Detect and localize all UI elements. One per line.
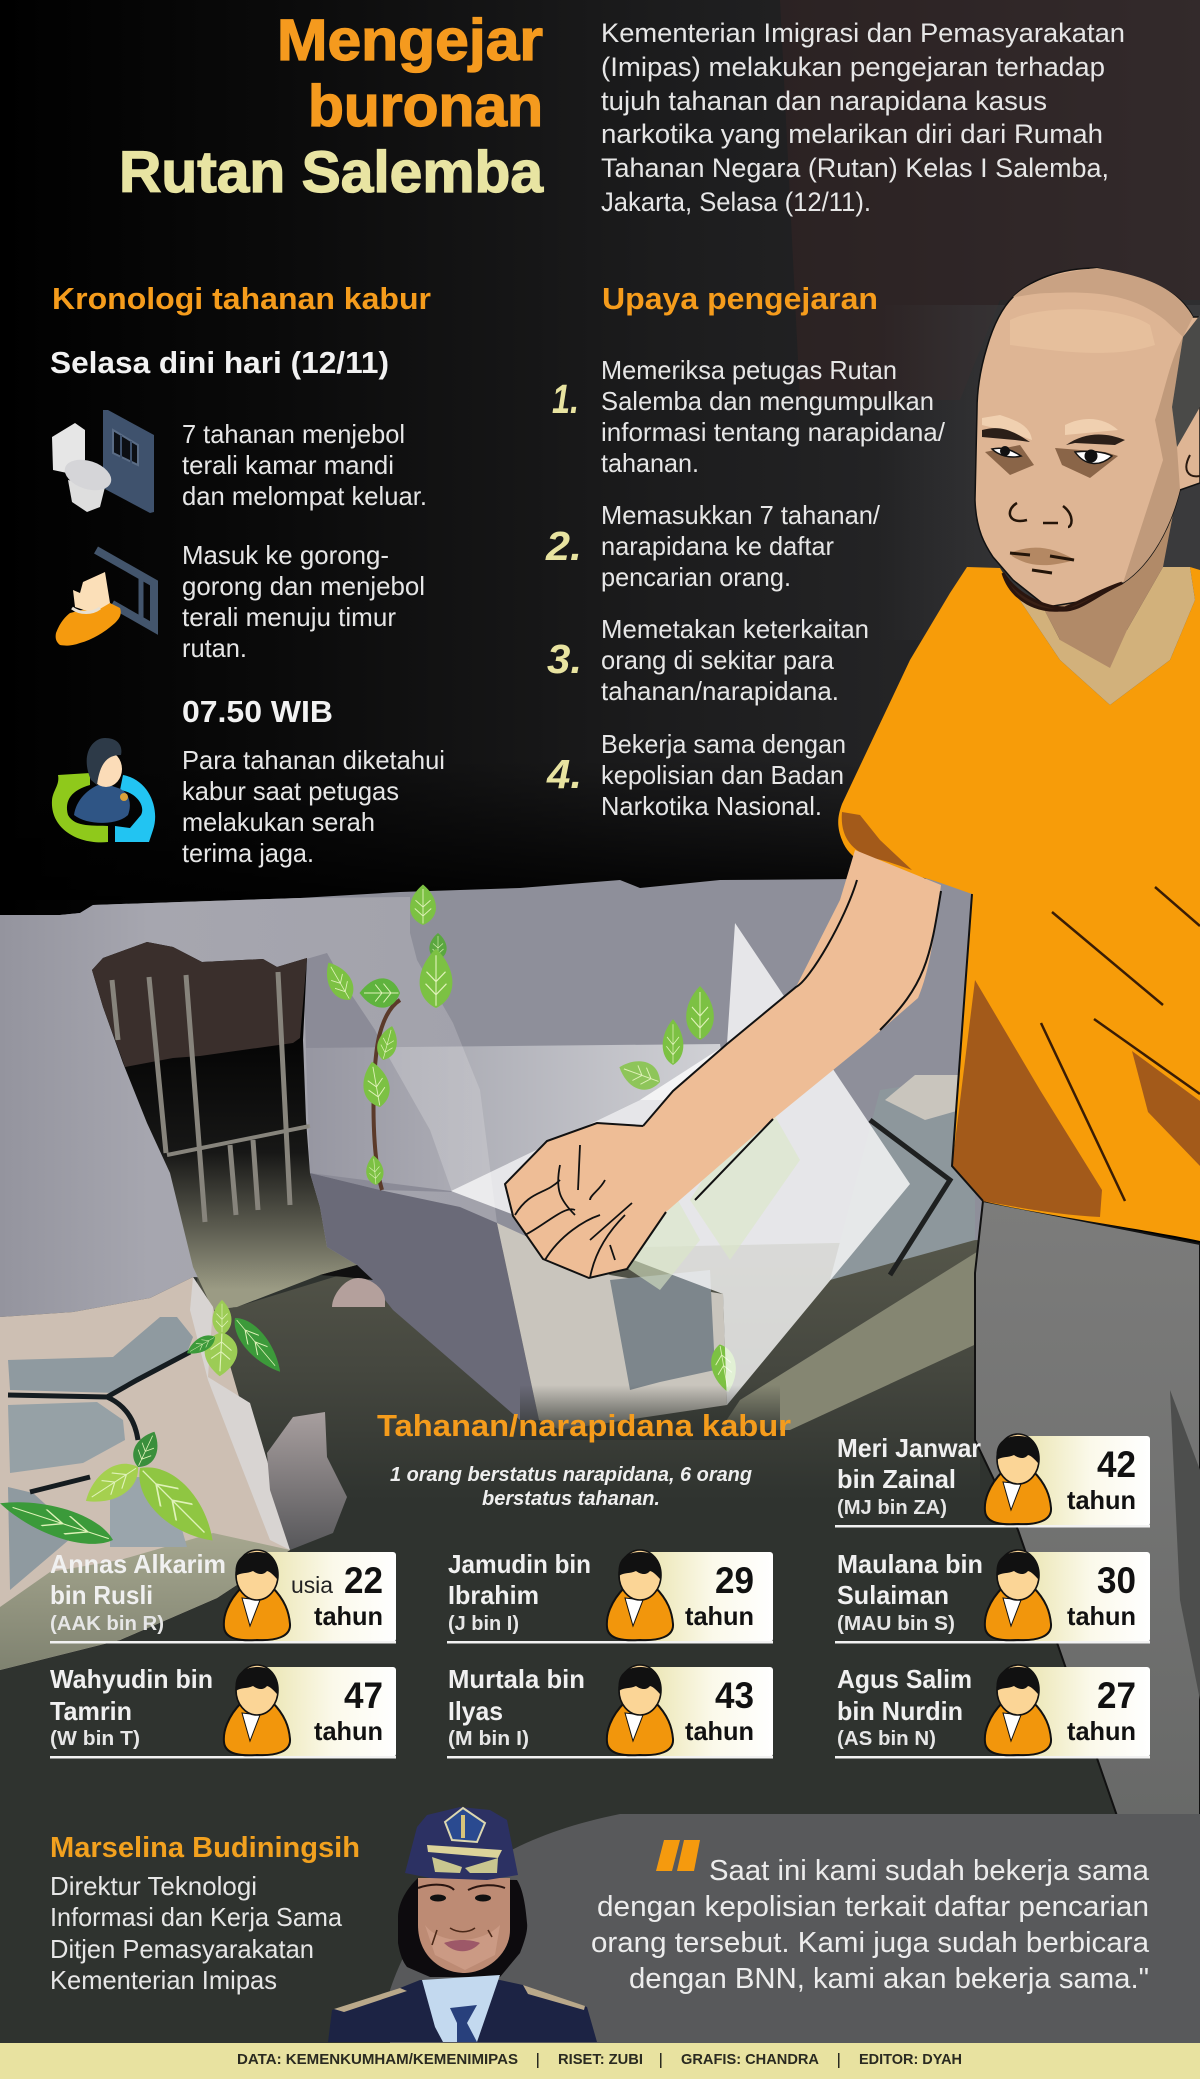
note: status <box>390 1464 752 1510</box>
card: Murtala: Murtala bin <box>448 1664 585 1694</box>
list item 2: pencarian orang. <box>601 562 791 592</box>
heading: upaya: Upaya pengejaran <box>602 281 878 316</box>
card: Maulana <box>835 1549 1150 1644</box>
card: Agus Salim: Agus Salim <box>837 1664 972 1694</box>
card: Annas Alkarim: (AAK bin R) <box>50 1613 164 1635</box>
illustration: escape hole scene <box>0 878 1200 2050</box>
beige ground <box>497 1223 727 1430</box>
title <box>119 8 544 205</box>
portrait: official <box>328 1807 597 2042</box>
list item 3 <box>547 614 869 706</box>
role: Ditjen Pemasyarakatan <box>50 1934 314 1964</box>
quote text: orang tersebut. Kami juga sudah berbicara <box>591 1927 1150 1959</box>
text: step 3: melakukan serah <box>182 807 375 837</box>
fade under heading <box>520 1385 780 1440</box>
list item 3: tahanan/narapidana. <box>601 676 839 706</box>
text: step 1 <box>182 419 427 511</box>
left beige rock <box>0 1277 290 1670</box>
card: Jamudin: tahun <box>685 1601 754 1631</box>
quote text: dengan BNN, kami akan bekerja sama." <box>629 1963 1149 1995</box>
role: Kementerian Imipas <box>50 1965 277 1995</box>
footer credits <box>0 2043 1200 2079</box>
text: step 3 <box>182 745 445 868</box>
intro text: (Imipas) melakukan pengejaran terhadap <box>601 52 1105 82</box>
card: Annas Alkarim: 22 <box>344 1560 383 1601</box>
collar <box>1013 567 1195 705</box>
main plant <box>319 884 452 1190</box>
text: step 2 <box>182 540 425 663</box>
list item 2: 2. <box>545 523 582 569</box>
card: Agus Salim: 27 <box>1097 1675 1136 1716</box>
list item 1: Memeriksa petugas Rutan <box>601 355 897 385</box>
crack and pink stone <box>320 1265 373 1280</box>
role: Direktur Teknologi <box>50 1871 257 1901</box>
list item 3: 3. <box>547 636 582 682</box>
stones <box>8 1317 193 1393</box>
list item 3: Memetakan keterkaitan <box>601 614 869 644</box>
intro text: tujuh tahanan dan narapidana kasus <box>601 86 1047 116</box>
background: dark top section <box>0 0 1200 950</box>
card: Wahyudin: tahun <box>314 1716 383 1746</box>
bottom-left plants <box>213 1300 231 1335</box>
role <box>50 1871 343 1995</box>
neck <box>1043 493 1177 668</box>
card: Murtala: Ilyas <box>448 1696 503 1726</box>
arm <box>505 850 941 1278</box>
icon: hand at bars <box>56 550 154 646</box>
text: step 3: kabur saat petugas <box>182 776 399 806</box>
list item 1: 1. <box>552 376 579 422</box>
card: Agus Salim: (AS bin N) <box>837 1728 936 1750</box>
intro text <box>601 18 1125 217</box>
card: Maulana: (MAU bin S) <box>837 1613 955 1635</box>
icon: toilet and cell door <box>52 410 154 513</box>
list item 4: 4. <box>546 751 582 797</box>
title: Rutan Salemba <box>119 140 544 205</box>
card: Murtala: tahun <box>685 1716 754 1746</box>
translucent band <box>306 1044 730 1191</box>
card: Meri Janwar: (MJ bin ZA) <box>837 1497 947 1519</box>
card: Meri Janwar: bin Zainal <box>837 1464 956 1494</box>
face <box>418 1878 510 1973</box>
quote text: dengan kepolisian terkait daftar pencarian <box>597 1891 1149 1923</box>
list item 2: narapidana ke daftar <box>601 531 834 561</box>
shirt and tie <box>422 1975 500 2042</box>
intro text: Tahanan Negara (Rutan) Kelas I Salemba, <box>601 153 1109 183</box>
wall <box>0 878 1000 1300</box>
card: Meri Janwar: 42 <box>1097 1444 1136 1485</box>
card: Annas Alkarim: tahun <box>314 1601 383 1631</box>
footer credits: DATA: KEMENKUMHAM/KEMENIMIPAS <box>237 2051 518 2068</box>
pants <box>975 1201 1200 1816</box>
panel: kronologi <box>50 281 445 868</box>
subheading: time: 07.50 WIB <box>182 694 333 729</box>
hole <box>92 942 357 1310</box>
card: Wahyudin: (W bin T) <box>50 1728 140 1750</box>
lower ground <box>0 1265 1200 2050</box>
heading: kronologi: Kronologi tahanan kabur <box>52 281 431 316</box>
footer credits: EDITOR: DYAH <box>859 2051 962 2068</box>
list item 2: Memasukkan 7 tahanan/ <box>601 500 881 530</box>
card: Jamudin: Ibrahim <box>448 1580 539 1610</box>
intro text: Kementerian Imigrasi dan Pemasyarakatan <box>601 18 1125 48</box>
card: Meri Janwar <box>835 1433 1150 1528</box>
name: Marselina Budiningsih <box>50 1832 360 1864</box>
rock pieces behind paper <box>610 1270 715 1390</box>
list item 1: tahanan. <box>601 448 699 478</box>
card: Maulana: 30 <box>1097 1560 1136 1601</box>
text: step 3: terima jaga. <box>182 838 314 868</box>
text: step 2: rutan. <box>182 633 247 663</box>
list item 1: informasi tentang narapidana/ <box>601 417 946 447</box>
icon: quote mark <box>656 1840 700 1871</box>
hair <box>398 1878 527 1977</box>
card: Maulana: Maulana bin <box>837 1549 983 1579</box>
list item 1: Salemba dan mengumpulkan <box>601 386 934 416</box>
text: step 2: Masuk ke gorong- <box>182 540 389 570</box>
text: official name and title <box>50 1832 360 1995</box>
card: Jamudin: Jamudin bin <box>448 1549 591 1579</box>
footer credits: RISET: ZUBI <box>558 2051 643 2068</box>
dark wedge <box>310 1173 539 1420</box>
eyes and brows <box>982 415 1125 478</box>
card: Annas Alkarim: usia <box>291 1572 333 1598</box>
plant behind paper <box>686 986 714 1040</box>
list item 2 <box>545 500 881 592</box>
head <box>975 268 1200 607</box>
note: status: berstatus tahanan. <box>482 1488 660 1510</box>
fist fingers <box>515 1145 632 1278</box>
card: Wahyudin: Wahyudin bin <box>50 1664 213 1694</box>
icon: guard shift change <box>52 738 155 842</box>
card: Maulana: Sulaiman <box>837 1580 949 1610</box>
subheading: date: Selasa dini hari (12/11) <box>50 345 389 380</box>
card: Murtala: 43 <box>715 1675 754 1716</box>
list item 4: Bekerja sama dengan <box>601 729 846 759</box>
card: Annas Alkarim: bin Rusli <box>50 1580 153 1610</box>
list item 3: orang di sekitar para <box>601 645 835 675</box>
list item 4: Narkotika Nasional. <box>601 791 822 821</box>
title: buronan <box>308 74 543 139</box>
hat <box>405 1807 518 1880</box>
note: status: 1 orang berstatus narapidana, 6 orang <box>390 1464 752 1486</box>
intro text: Jakarta, Selasa (12/11). <box>601 187 871 217</box>
card: Wahyudin <box>50 1664 396 1758</box>
list item 4 <box>546 729 846 821</box>
card: Wahyudin: Tamrin <box>50 1696 132 1726</box>
text: step 1: 7 tahanan menjebol <box>182 419 405 449</box>
card: Agus Salim <box>835 1664 1150 1758</box>
uniform <box>328 1980 597 2042</box>
quote text: Saat ini kami sudah bekerja sama <box>709 1855 1150 1887</box>
card: Agus Salim: bin Nurdin <box>837 1696 963 1726</box>
intro text: narkotika yang melarikan diri dari Rumah <box>601 119 1103 149</box>
card: Meri Janwar: Meri Janwar <box>837 1433 981 1463</box>
quote text <box>591 1855 1150 1995</box>
panel: quote background <box>390 1814 1200 2043</box>
nose and mouth <box>1010 503 1072 527</box>
card: Agus Salim: tahun <box>1067 1716 1136 1746</box>
text: step 1: dan melompat keluar. <box>182 481 427 511</box>
heading: tahanan/narapidana kabur: Tahanan/narapidana kabur <box>377 1408 791 1443</box>
left pillar <box>0 897 497 1317</box>
footer credits: GRAFIS: CHANDRA <box>681 2051 819 2068</box>
card: Maulana: tahun <box>1067 1601 1136 1631</box>
paper <box>451 923 910 1405</box>
card: Meri Janwar: tahun <box>1067 1485 1136 1515</box>
card: Jamudin: 29 <box>715 1560 754 1601</box>
card: Wahyudin: 47 <box>344 1675 383 1716</box>
bars <box>112 972 310 1222</box>
illustration: fugitive man <box>505 268 1200 1816</box>
role: Informasi dan Kerja Sama <box>50 1902 343 1932</box>
lavender shaded wall <box>303 953 452 1192</box>
text: step 2: terali menuju timur <box>182 602 396 632</box>
card: Murtala <box>447 1664 773 1758</box>
card: Annas Alkarim <box>50 1549 396 1644</box>
text: step 1: terali kamar mandi <box>182 450 394 480</box>
shirt <box>838 567 1200 1241</box>
list item 1 <box>552 355 946 478</box>
card: Jamudin: (J bin I) <box>448 1613 519 1635</box>
text: step 3: Para tahanan diketahui <box>182 745 445 775</box>
panel: upaya pengejaran <box>545 281 946 821</box>
list item 4: kepolisian dan Badan <box>601 760 844 790</box>
text: step 2: gorong dan menjebol <box>182 571 425 601</box>
card: Jamudin <box>447 1549 773 1644</box>
title: Mengejar <box>277 8 543 73</box>
card: Annas Alkarim: Annas Alkarim <box>50 1549 226 1579</box>
card: Murtala: (M bin I) <box>448 1728 529 1750</box>
